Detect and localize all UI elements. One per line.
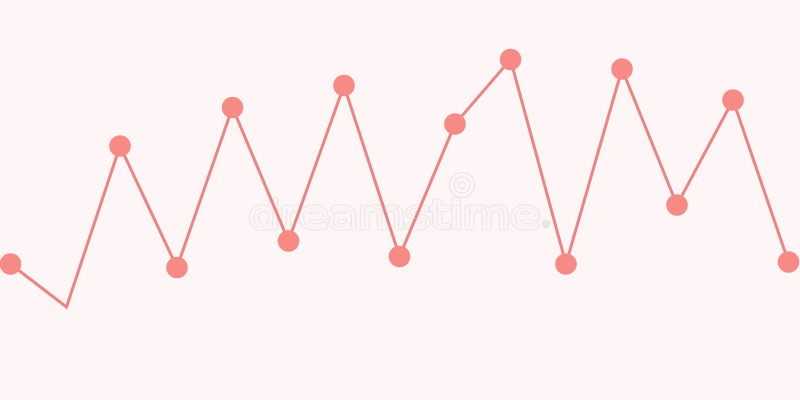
data line — [10, 60, 788, 307]
watermark — [249, 172, 550, 237]
watermark: dreamstime — [249, 193, 540, 237]
watermark: dreamstime — [249, 193, 540, 237]
data points — [0, 49, 799, 278]
